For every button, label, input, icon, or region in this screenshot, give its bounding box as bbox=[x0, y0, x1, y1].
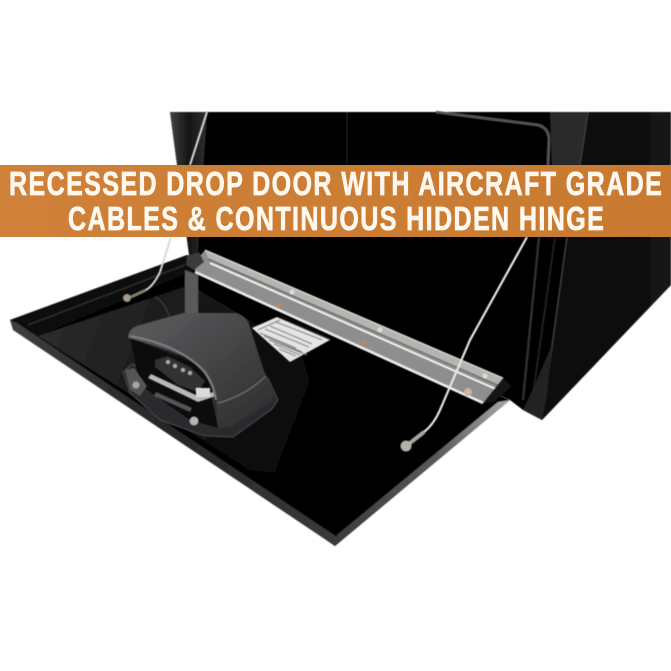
side panel corner highlight bbox=[523, 345, 552, 420]
box right side panel bbox=[542, 112, 671, 420]
door opening frame edge bbox=[436, 112, 549, 165]
lock mechanism plates bbox=[125, 356, 216, 426]
hinge bbox=[186, 250, 512, 403]
door left lip bbox=[10, 320, 337, 546]
lock base flange bbox=[123, 364, 278, 437]
box left frame bbox=[170, 112, 207, 262]
drop door bbox=[10, 255, 510, 546]
box top right frame bbox=[550, 112, 588, 165]
door floor bbox=[38, 285, 340, 480]
lock box bbox=[123, 313, 278, 437]
door right lip bbox=[335, 400, 510, 546]
warning label bbox=[252, 316, 331, 362]
lock mechanism opening bbox=[130, 338, 218, 428]
pillar reflection bbox=[185, 270, 198, 320]
right cable bbox=[400, 237, 527, 452]
door panel bbox=[10, 255, 510, 546]
door top left wall bbox=[10, 255, 195, 336]
left cable bbox=[123, 112, 207, 302]
toolbox body bbox=[170, 112, 671, 420]
lock cover bbox=[128, 313, 274, 428]
banner heading line 1: RECESSED DROP DOOR WITH AIRCRAFT GRADE bbox=[9, 166, 662, 203]
orange banner bbox=[0, 165, 671, 238]
banner heading line 2: CABLES & CONTINUOUS HIDDEN HINGE bbox=[68, 201, 604, 238]
